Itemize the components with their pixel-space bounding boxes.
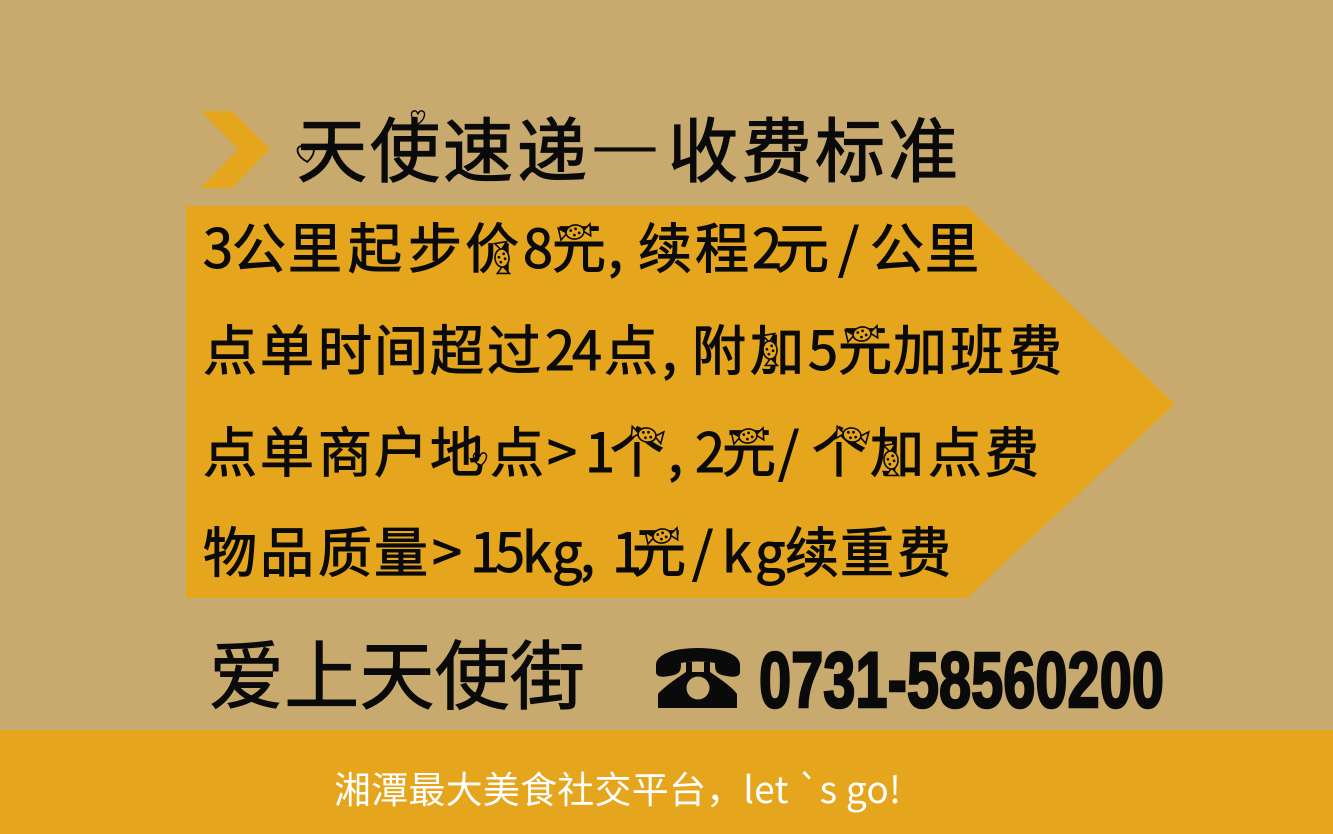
pricing line 4: 物品质量>15kg,1元/kg续重费 [203,509,951,588]
bottom band [0,730,1333,834]
brand name: 爱上天使街 [209,616,585,725]
icon: title hearts [297,111,425,163]
slogan: 湘潭最大美食社交平台，let `s go! [334,760,901,814]
icon: candy decorations [473,223,899,545]
icon: chevron arrow [201,111,270,188]
title: 天使速递—收费标准 [297,96,958,197]
pricing line 3: 点单商户地点>1个,2元/个加点费 [203,409,1039,488]
pricing line 2: 点单时间超过24点,附加5元加班费 [203,307,1062,386]
icon: telephone [656,648,740,708]
phone number: 0731-58560200 [759,635,1164,724]
panel: pricing arrow [186,206,1175,598]
pricing line 1: 3公里起步价8元,续程2元/公里 [203,205,979,284]
